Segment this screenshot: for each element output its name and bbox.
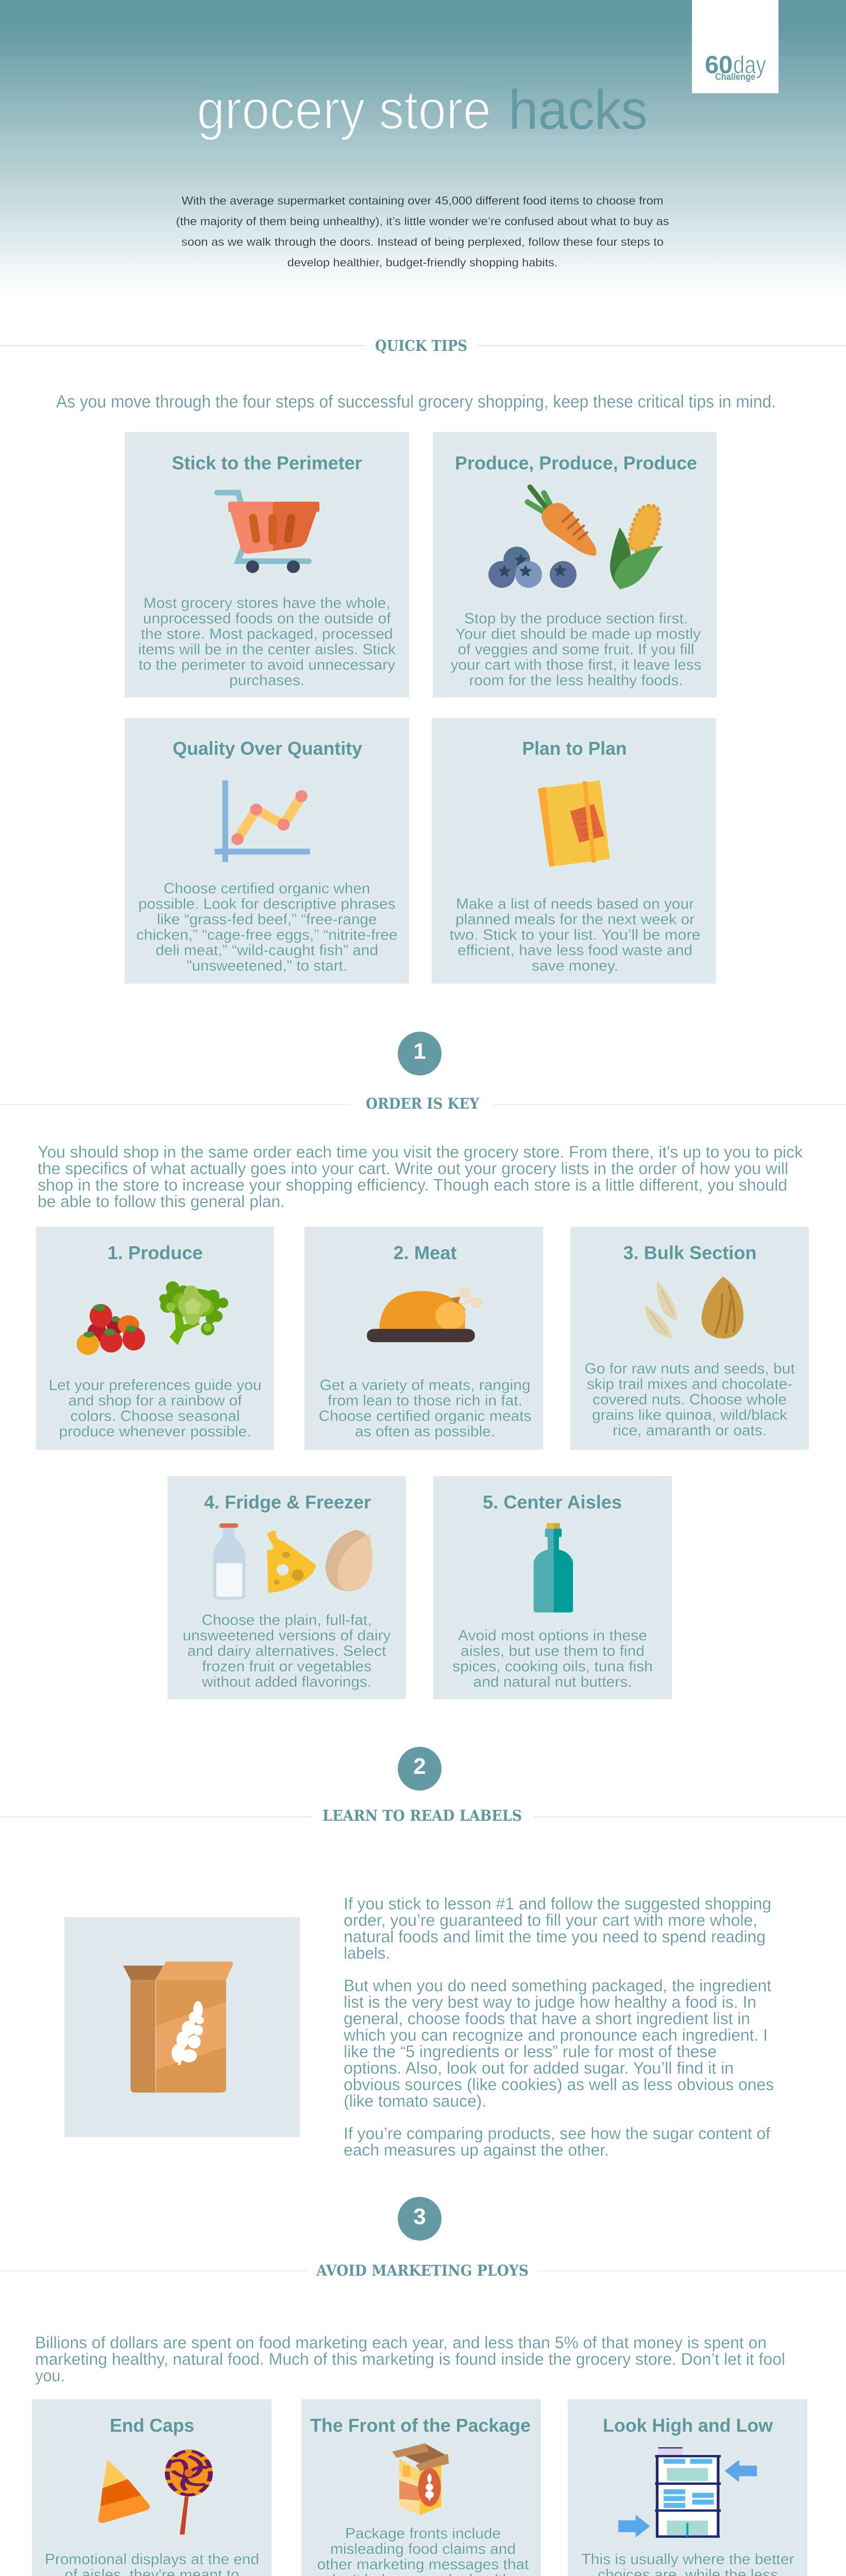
panel: 5. center aisles xyxy=(433,1476,672,1699)
section heading: learn to read labels: LEARN TO READ LABELS xyxy=(323,1807,522,1824)
panel: the front of the package xyxy=(301,2399,541,2576)
body text: Choose certified organic meats xyxy=(318,1408,532,1425)
body text xyxy=(45,2551,259,2576)
body text: of veggies and some fruit. If you fill xyxy=(458,641,695,658)
learn to read labels text: each measures up against the other. xyxy=(344,2141,609,2159)
avoid marketing ploys intro text: Billions of dollars are spent on food marketing each year, and less than 5% of that money is spent on xyxy=(35,2333,767,2352)
header gradient background xyxy=(0,0,846,309)
title: hacks xyxy=(509,78,648,141)
body text: colors. Choose seasonal xyxy=(70,1408,240,1425)
body text xyxy=(580,2551,796,2576)
avoid marketing ploys intro text: you. xyxy=(35,2366,65,2385)
body text: Make a list of needs based on your xyxy=(456,896,694,912)
learn to read labels text xyxy=(343,1894,774,2159)
order is key intro text: be able to follow this general plan. xyxy=(38,1192,285,1211)
quick tips intro text: As you move through the four steps of successful grocery shopping, keep these critical tips in mind. xyxy=(56,392,776,412)
icon: milk, cheese, egg xyxy=(213,1523,373,1600)
body text: planned meals for the next week or xyxy=(455,911,695,928)
heading: Look High and Low xyxy=(603,2415,773,2436)
panel: produce, produce, produce xyxy=(433,432,717,698)
learn to read labels text: If you’re comparing products, see how the sugar content of xyxy=(344,2124,770,2143)
body text: like “grass-fed beef,” “free-range xyxy=(157,911,377,928)
body text: skip trail mixes and chocolate- xyxy=(587,1376,792,1393)
body text: other marketing messages that xyxy=(317,2556,529,2573)
body text: the store. Most packaged, processed xyxy=(141,626,393,642)
intro paragraph: With the average supermarket containing over 45,000 different food items to choose from xyxy=(181,194,664,207)
learn to read labels text: natural foods and limit the time you need to spend reading xyxy=(344,1927,766,1946)
body text: Avoid most options in these xyxy=(458,1628,647,1644)
body text: Promotional displays at the end xyxy=(45,2551,259,2568)
body text: purchases. xyxy=(229,672,304,689)
section heading: order is key: ORDER IS KEY xyxy=(366,1095,479,1112)
body text: Let your preferences guide you xyxy=(48,1377,262,1394)
icon: shopping cart xyxy=(217,493,319,573)
learn to read labels text: like the “5 ingredients or less” rule for most of these xyxy=(344,2042,717,2061)
body text: Choose the plain, full-fat, xyxy=(202,1612,372,1629)
heading: 4. Fridge & Freezer xyxy=(204,1492,371,1513)
heading: Quality Over Quantity xyxy=(173,738,362,759)
body text: Package fronts include xyxy=(345,2526,501,2542)
icon: cereal box xyxy=(123,1961,233,2093)
body text xyxy=(317,2526,529,2576)
learn to read labels text: (like tomato sauce). xyxy=(344,2092,486,2110)
body text: from lean to those rich in fat. xyxy=(328,1393,522,1409)
learn to read labels text: labels. xyxy=(344,1944,390,1962)
learn to read labels text: options. Also, look out for added sugar. You’ll find it in xyxy=(344,2059,734,2077)
body text: and natural nut butters. xyxy=(473,1674,632,1690)
logo: 60 day Challenge: day xyxy=(733,52,766,79)
learn to read labels text: which you can recognize and pronounce each ingredient. I xyxy=(343,2026,768,2044)
body text: Your diet should be made up mostly xyxy=(455,626,701,642)
icon: notebook xyxy=(538,781,610,867)
logo: 60 day Challenge: Challenge xyxy=(715,72,755,82)
number badge 1: 1 xyxy=(413,1039,426,1064)
icon: line chart xyxy=(215,781,310,862)
body text: without added flavorings. xyxy=(201,1674,371,1690)
number badge 3 xyxy=(398,2197,442,2241)
body text xyxy=(48,1377,262,1440)
body text xyxy=(449,896,701,974)
number badge 2 xyxy=(398,1747,442,1791)
order is key intro text: shop in the store to increase your shopping efficiency. Though each store is a little different, you should xyxy=(38,1176,787,1194)
avoid marketing ploys intro text xyxy=(35,2333,785,2385)
number badge 2: 2 xyxy=(413,1754,426,1779)
section heading: quick tips: QUICK TIPS xyxy=(375,337,467,354)
panel: cereal box image xyxy=(64,1917,300,2137)
body text: and dairy alternatives. Select xyxy=(188,1643,386,1659)
panel: stick to the perimeter xyxy=(125,432,409,698)
body text: efficient, have less food waste and xyxy=(458,942,692,959)
icon: tomatoes xyxy=(77,1304,145,1355)
intro paragraph: soon as we walk through the doors. Instead of being perplexed, follow these four steps to xyxy=(181,235,664,248)
body text: possible. Look for descriptive phrases xyxy=(138,896,396,912)
body text: to the perimeter to avoid unnecessary xyxy=(139,657,396,673)
heading: Plan to Plan xyxy=(522,738,627,759)
icon: broccoli xyxy=(159,1281,228,1345)
icon: blueberries xyxy=(488,547,577,588)
heading: The Front of the Package xyxy=(310,2415,531,2436)
icon: seeds and almond xyxy=(645,1277,743,1338)
intro paragraph: develop healthier, budget-friendly shopping habits. xyxy=(287,256,557,269)
body text: items will be in the center aisles. Stick xyxy=(138,641,396,658)
learn to read labels text: general, choose foods that have a short ingredient list in xyxy=(344,2009,750,2028)
logo: 60 day Challenge xyxy=(692,0,779,93)
icon: store shelves with arrows xyxy=(618,2447,757,2538)
number badge 3: 3 xyxy=(413,2204,426,2229)
icon: candy corn and lollipop xyxy=(98,2449,213,2534)
body text: unprocessed foods on the outside of xyxy=(143,611,391,627)
body text: frozen fruit or vegetables xyxy=(202,1658,371,1675)
title: grocery store xyxy=(197,78,491,141)
body text: covered nuts. Choose whole xyxy=(593,1392,787,1408)
body text: "unsweetened," to start. xyxy=(187,958,347,974)
body text xyxy=(584,1361,794,1439)
body text xyxy=(452,1628,653,1690)
body text: as often as possible. xyxy=(355,1423,495,1440)
panel: 4. fridge and freezer xyxy=(167,1476,406,1699)
intro paragraph: (the majority of them being unhealthy), it’s little wonder we’re confused about what to buy as xyxy=(176,215,669,228)
number badge 1 xyxy=(398,1031,442,1076)
body text xyxy=(450,611,702,689)
body text: two. Stick to your list. You’ll be more xyxy=(449,927,701,943)
order is key intro text: You should shop in the same order each time you visit the grocery store. From there, it's up to you to pick xyxy=(38,1143,803,1161)
body text xyxy=(136,880,398,974)
panel: end caps xyxy=(32,2399,272,2576)
body text: Most grocery stores have the whole, xyxy=(143,595,391,612)
body text xyxy=(182,1612,391,1690)
icon: roast turkey xyxy=(367,1286,482,1342)
body text: spices, cooking oils, tuna fish xyxy=(452,1658,653,1675)
body text: produce whenever possible. xyxy=(59,1423,251,1440)
heading: Stick to the Perimeter xyxy=(172,452,362,473)
avoid marketing ploys intro text: marketing healthy, natural food. Much of this marketing is found inside the grocery store. Don’t let it fool xyxy=(35,2350,785,2368)
heading: 2. Meat xyxy=(394,1242,457,1263)
body text: and shop for a rainbow of xyxy=(68,1393,242,1409)
learn to read labels text: list is the very best way to judge how healthy a food is. In xyxy=(344,1993,756,2011)
heading: End Caps xyxy=(110,2415,194,2436)
body text: deli meat,” “wild-caught fish” and xyxy=(156,942,378,959)
heading: 1. Produce xyxy=(107,1242,203,1263)
body text: your cart with those first, it leave less xyxy=(450,657,702,673)
body text: Get a variety of meats, ranging xyxy=(319,1377,531,1394)
body text: Stop by the produce section first. xyxy=(464,611,688,627)
body text: room for the less healthy foods. xyxy=(469,672,683,689)
icon: oil bottle xyxy=(534,1523,573,1613)
body text: save money. xyxy=(532,958,618,974)
panel: 1. produce xyxy=(36,1227,274,1450)
panel: look high and low xyxy=(568,2399,807,2576)
body text: aisles, but use them to find xyxy=(461,1643,645,1659)
panel: 3. bulk section xyxy=(570,1227,809,1450)
learn to read labels text: order, you’re guaranteed to fill your cart with more whole, xyxy=(344,1911,757,1929)
body text: Go for raw nuts and seeds, but xyxy=(584,1361,794,1377)
logo: 60 day Challenge: 60 xyxy=(705,52,733,79)
panel: quality over quantity xyxy=(125,718,409,984)
heading: 5. Center Aisles xyxy=(483,1492,622,1513)
heading: 3. Bulk Section xyxy=(623,1242,756,1263)
section heading: avoid marketing ploys: AVOID MARKETING PLOYS xyxy=(316,2262,529,2279)
body text: rice, amaranth or oats. xyxy=(613,1422,767,1439)
body text: chicken,” “cage-free eggs,” “nitrite-free xyxy=(136,927,398,943)
learn to read labels text: obvious sources (like cookies) as well as less obvious ones xyxy=(344,2075,774,2094)
body text: misleading food claims and xyxy=(330,2541,516,2557)
panel: plan to plan xyxy=(432,718,716,984)
intro paragraph xyxy=(176,194,669,269)
learn to read labels text: But when you do need something packaged, the ingredient xyxy=(344,1976,771,1995)
panel: 2. meat xyxy=(304,1227,543,1450)
body text: grains like quinoa, wild/black xyxy=(592,1407,788,1423)
body text: Choose certified organic when xyxy=(164,880,370,897)
icon: carrot and corn xyxy=(528,487,663,589)
body text: This is usually where the better xyxy=(581,2551,794,2568)
order is key intro text: the specifics of what actually goes into your cart. Write out your grocery lists in the order of how you will xyxy=(38,1159,788,1178)
body text xyxy=(318,1377,532,1440)
heading: Produce, Produce, Produce xyxy=(455,452,697,473)
icon: food package xyxy=(392,2443,449,2515)
body text: unsweetened versions of dairy xyxy=(182,1628,391,1644)
learn to read labels text: If you stick to lesson #1 and follow the suggested shopping xyxy=(344,1894,771,1913)
order is key intro text xyxy=(38,1143,803,1211)
body text xyxy=(138,595,396,689)
